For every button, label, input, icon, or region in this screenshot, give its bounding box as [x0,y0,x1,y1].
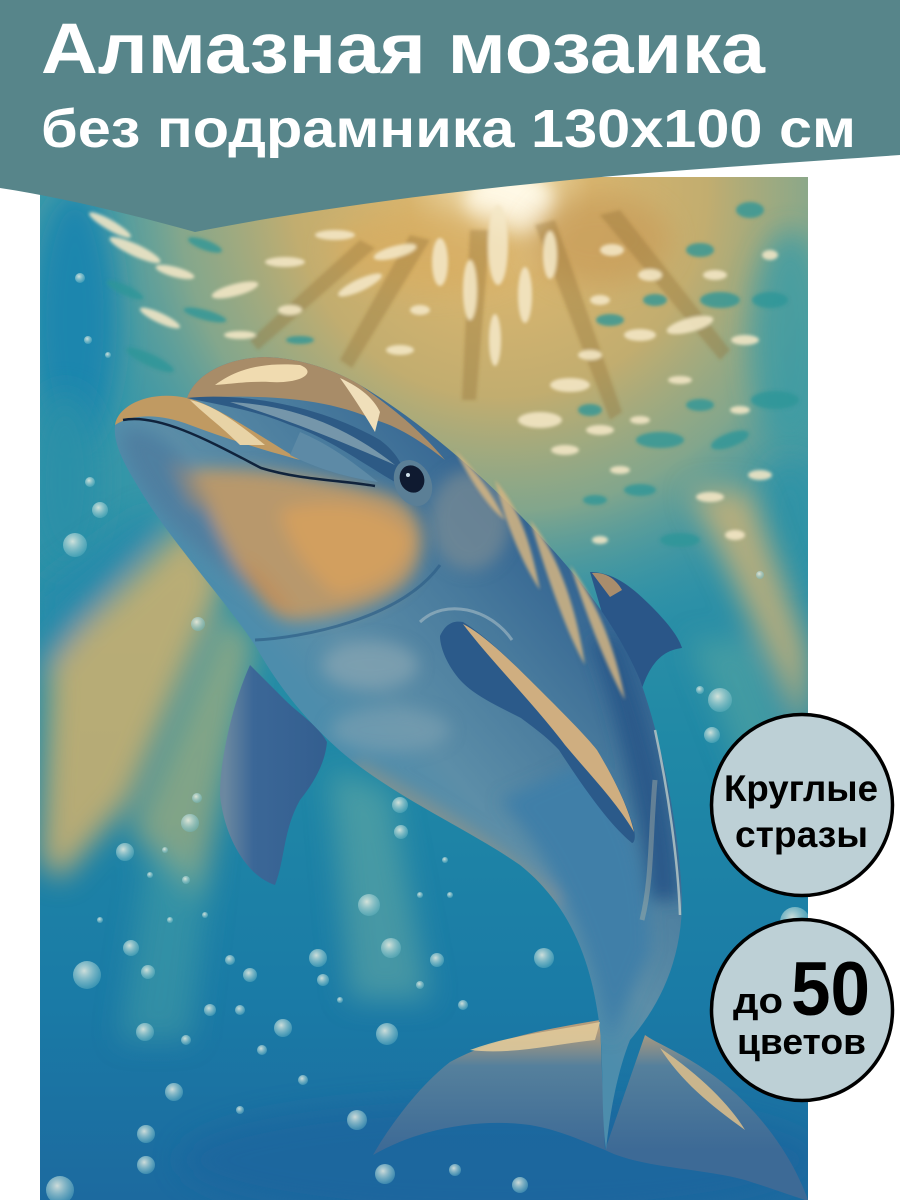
painting: dolphin underwater [27,173,830,1200]
badge: round rhinestones [712,714,892,896]
badge: up to 50 colours [712,920,892,1100]
badge: up to 50 colours: цветов [737,1021,866,1062]
right flipper [440,622,635,843]
water background [27,173,830,1200]
header banner [0,0,900,232]
tail fluke left [373,1020,605,1155]
beak top [115,396,300,460]
badge: up to 50 colours: до [733,980,783,1021]
dark band above mouth [187,396,400,482]
mouth line [123,419,375,486]
fluke highlights [470,1022,600,1051]
gill curve [255,565,440,640]
body edge highlights [655,730,680,915]
badge: up to 50 colours: 50 [791,947,870,1032]
badge: round rhinestones: стразы [735,814,868,855]
left flipper [220,665,327,885]
bubbles [46,273,810,1200]
head top and melon [187,357,445,460]
back highlights [455,450,625,700]
dorsal fin [590,572,682,695]
title: Алмазная мозаика [41,10,766,89]
belly warm colour [123,429,422,620]
dolphin [115,357,808,1200]
tail fluke right [605,1035,808,1200]
sun rays [40,490,808,1040]
surface light patches [87,202,799,547]
eye [394,460,432,506]
badge: round rhinestones: Круглые [724,768,878,809]
soft body shading [123,429,680,1040]
subtitle: без подрамника 130х100 см [41,99,856,159]
main body [115,357,682,1150]
